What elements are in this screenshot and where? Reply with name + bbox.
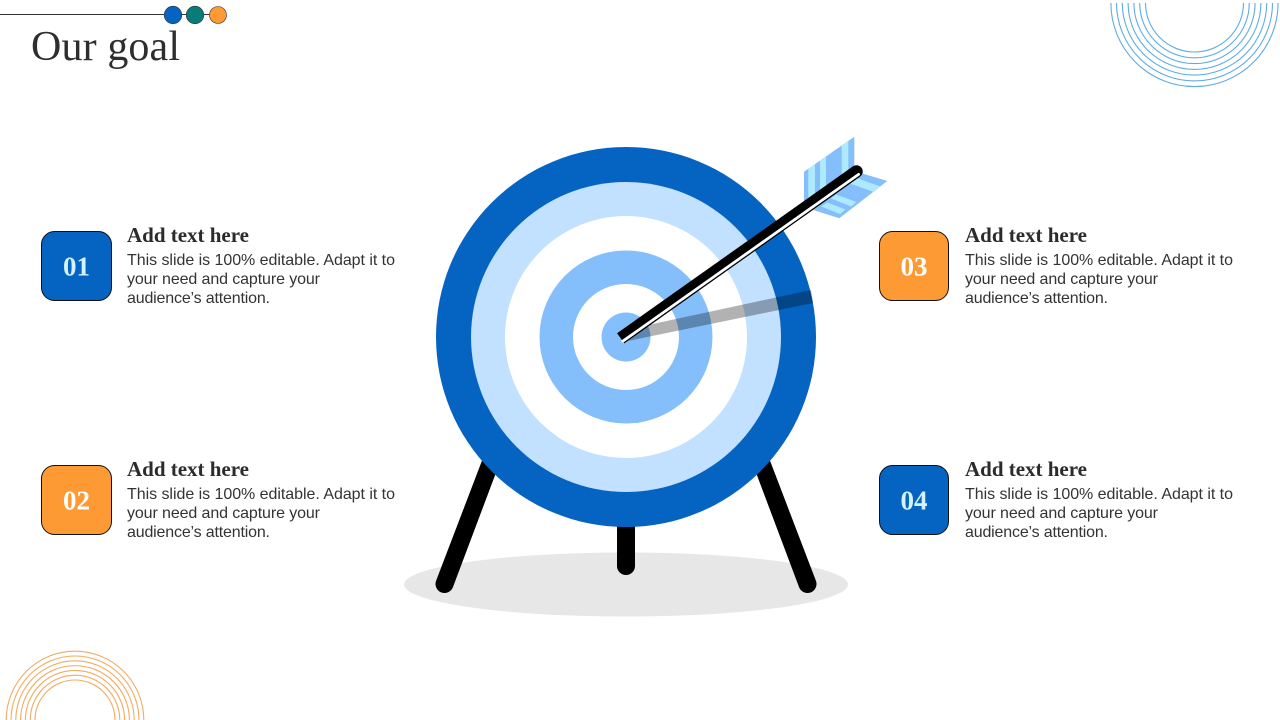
- target stand legs: [435, 458, 817, 593]
- item 01 text: [127, 223, 395, 307]
- arrow shadow: [628, 290, 813, 341]
- item 01 text: your need and capture your: [127, 271, 321, 288]
- item 03 text: [965, 223, 1233, 307]
- item 02 text: This slide is 100% editable. Adapt it to: [127, 486, 395, 503]
- target illustration: [404, 137, 887, 616]
- item 02 text: your need and capture your: [127, 505, 321, 522]
- arrow fletching: [804, 137, 887, 218]
- target rings: [436, 147, 816, 527]
- item 03 text: This slide is 100% editable. Adapt it to: [965, 252, 1233, 269]
- decorative orange arcs bottom left: [6, 651, 144, 720]
- item 02 text: Add text here: [127, 457, 249, 481]
- item 03 text: Add text here: [965, 223, 1087, 247]
- number badge 01: [42, 232, 112, 300]
- item 04 text: This slide is 100% editable. Adapt it to: [965, 486, 1233, 503]
- item 01: [42, 223, 395, 307]
- item 03 text: audience’s attention.: [965, 290, 1108, 307]
- number badge 02: [42, 466, 112, 534]
- item 02 text: audience’s attention.: [127, 524, 270, 541]
- item 02 text: [127, 457, 395, 541]
- arrow shaft: [621, 165, 863, 341]
- item 04 text: [965, 457, 1233, 541]
- item 04 text: audience’s attention.: [965, 524, 1108, 541]
- item 01 text: This slide is 100% editable. Adapt it to: [127, 252, 395, 269]
- item 04: [880, 457, 1233, 541]
- item 04 text: your need and capture your: [965, 505, 1159, 522]
- item 01 text: Add text here: [127, 223, 249, 247]
- item 01 text: audience’s attention.: [127, 290, 270, 307]
- item 04 text: Add text here: [965, 457, 1087, 481]
- title: Our goal: [31, 24, 180, 70]
- top-left line with three dots: [0, 6, 226, 24]
- ground shadow: [404, 552, 848, 616]
- item 03: [880, 223, 1233, 307]
- number badge 02: 02: [63, 486, 90, 516]
- decorative blue arcs top right: [1111, 3, 1278, 87]
- number badge 04: [880, 466, 948, 534]
- item 02: [42, 457, 395, 541]
- number badge 03: [880, 232, 948, 300]
- number badge 03: 03: [900, 252, 928, 282]
- item 03 text: your need and capture your: [965, 271, 1159, 288]
- number badge 01: 01: [63, 252, 90, 282]
- number badge 04: 04: [900, 486, 928, 516]
